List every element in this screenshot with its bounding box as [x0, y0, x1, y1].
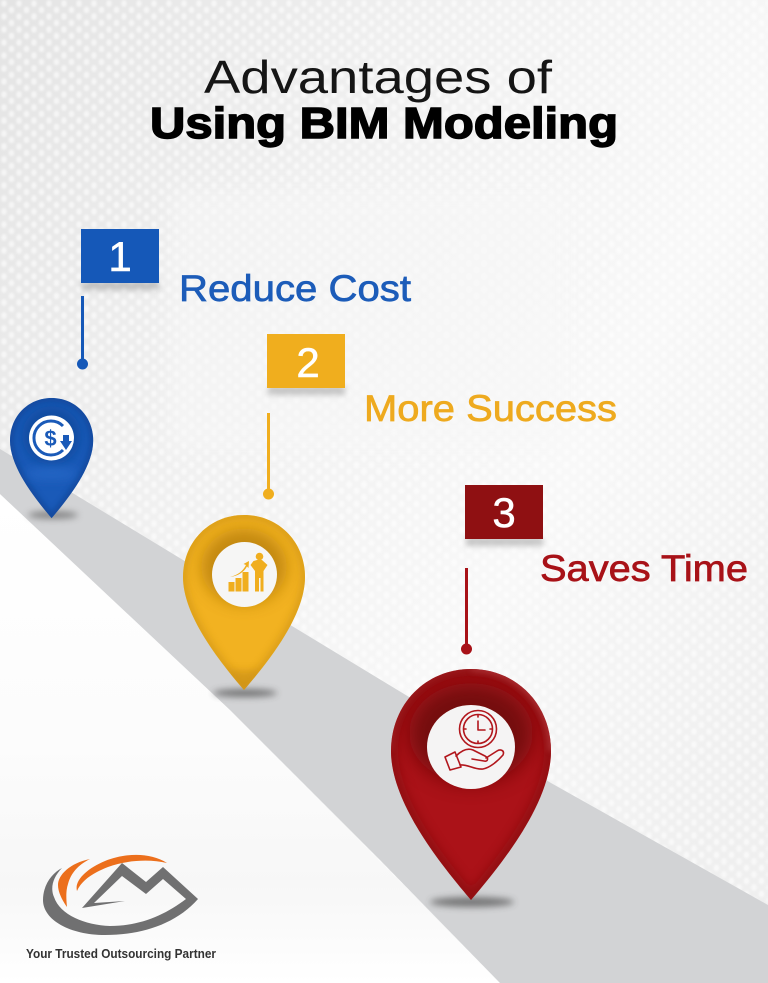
step 1 label: Reduce Cost — [179, 268, 412, 309]
pin 3: red — [391, 669, 551, 900]
title — [150, 51, 618, 148]
pin 2: yellow — [183, 515, 305, 697]
pin 1: blue — [10, 398, 93, 518]
step 2 connector — [263, 413, 274, 500]
title: Advantages of — [204, 51, 552, 103]
step 1 number box — [81, 229, 159, 290]
icon: growth chart and person — [212, 542, 277, 607]
step 1 number box: 1 — [108, 233, 132, 280]
step 1 connector — [77, 296, 88, 370]
title: Using BIM Modeling — [150, 99, 618, 148]
icon: clock over hand — [427, 705, 515, 789]
road band — [0, 449, 768, 983]
step 3 connector — [461, 568, 472, 654]
logo — [43, 855, 198, 935]
step 2 number box: 2 — [296, 339, 320, 386]
pin 1 shadow — [28, 511, 78, 519]
step 3 label: Saves Time — [540, 548, 748, 589]
step 3 number box — [465, 485, 543, 546]
tagline: Your Trusted Outsourcing Partner — [26, 947, 216, 961]
pin 3 shadow — [430, 897, 514, 907]
step 2 number box — [267, 334, 345, 395]
step 3 number box: 3 — [492, 489, 516, 536]
lower left white area — [0, 494, 500, 983]
pin 2 shadow — [213, 689, 277, 697]
step 2 label: More Success — [364, 388, 617, 429]
icon: dollar cost reduction: $ — [44, 426, 57, 451]
